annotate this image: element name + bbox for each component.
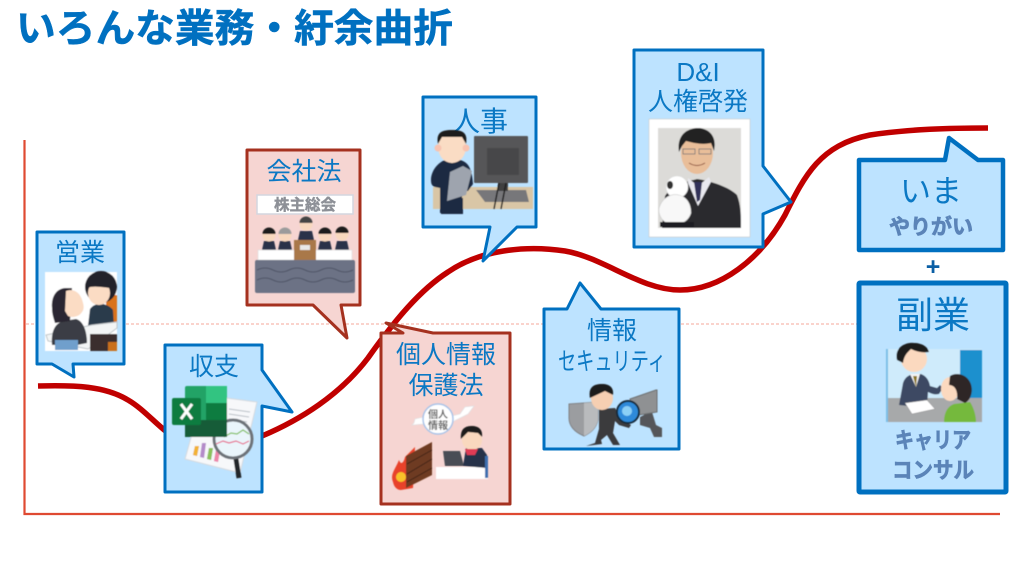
illustration: career consultation xyxy=(886,343,982,422)
label: 収支: 収支 xyxy=(189,353,239,381)
illustration: data leak and firewall xyxy=(392,404,488,490)
career curve xyxy=(38,128,988,436)
label: 情報セキュリティ: 情報 xyxy=(587,317,637,345)
illustration: data leak and firewall: 情報 xyxy=(428,419,448,432)
callout: 個人情報保護法: 保護法 xyxy=(408,372,484,400)
callout: 情報セキュリティ: セキュリティ xyxy=(558,348,666,376)
callout: 会社法 xyxy=(247,150,360,338)
callout: 副業 キャリアコンサル: コンサル xyxy=(892,458,974,483)
title: いろんな業務・紆余曲折 xyxy=(16,8,453,51)
callout: D&I 人権啓発 xyxy=(634,50,791,247)
illustration: report with magnifier xyxy=(172,386,257,478)
label: 副業: 副業 xyxy=(896,295,970,336)
callout: 個人情報保護法 xyxy=(381,323,510,504)
plus sign: + xyxy=(926,253,940,281)
illustration: sales meeting xyxy=(45,271,117,351)
callout: 営業 xyxy=(37,232,124,377)
callout: D&I 人権啓発: 人権啓発 xyxy=(648,88,748,116)
label: やりがい: やりがい xyxy=(889,215,973,239)
label: 人事: 人事 xyxy=(452,106,508,137)
callout: 収支 xyxy=(165,345,292,492)
illustration: shareholders meeting: 株主総会 xyxy=(274,196,336,214)
callout: いま やりがい xyxy=(859,138,1003,250)
label: 個人情報保護法: 個人情報 xyxy=(396,341,496,369)
illustration: guard and security camera xyxy=(569,384,662,446)
illustration: data leak and firewall: 個人 xyxy=(428,408,448,421)
label: 会社法: 会社法 xyxy=(266,158,342,186)
chart axes xyxy=(24,140,1000,514)
label: キャリアコンサル: キャリア xyxy=(895,428,971,453)
label: 営業: 営業 xyxy=(55,239,105,267)
photo: person with robot xyxy=(649,119,750,237)
callout: 情報セキュリティ xyxy=(544,283,679,449)
illustration: HR officer with monitor xyxy=(431,130,533,214)
label: いま: いま xyxy=(900,174,962,209)
callout: 人事 xyxy=(423,97,536,261)
callout: 副業 キャリアコンサル xyxy=(859,283,1006,492)
label: D&I 人権啓発: D&I xyxy=(676,57,720,87)
illustration: shareholders meeting xyxy=(255,195,355,293)
